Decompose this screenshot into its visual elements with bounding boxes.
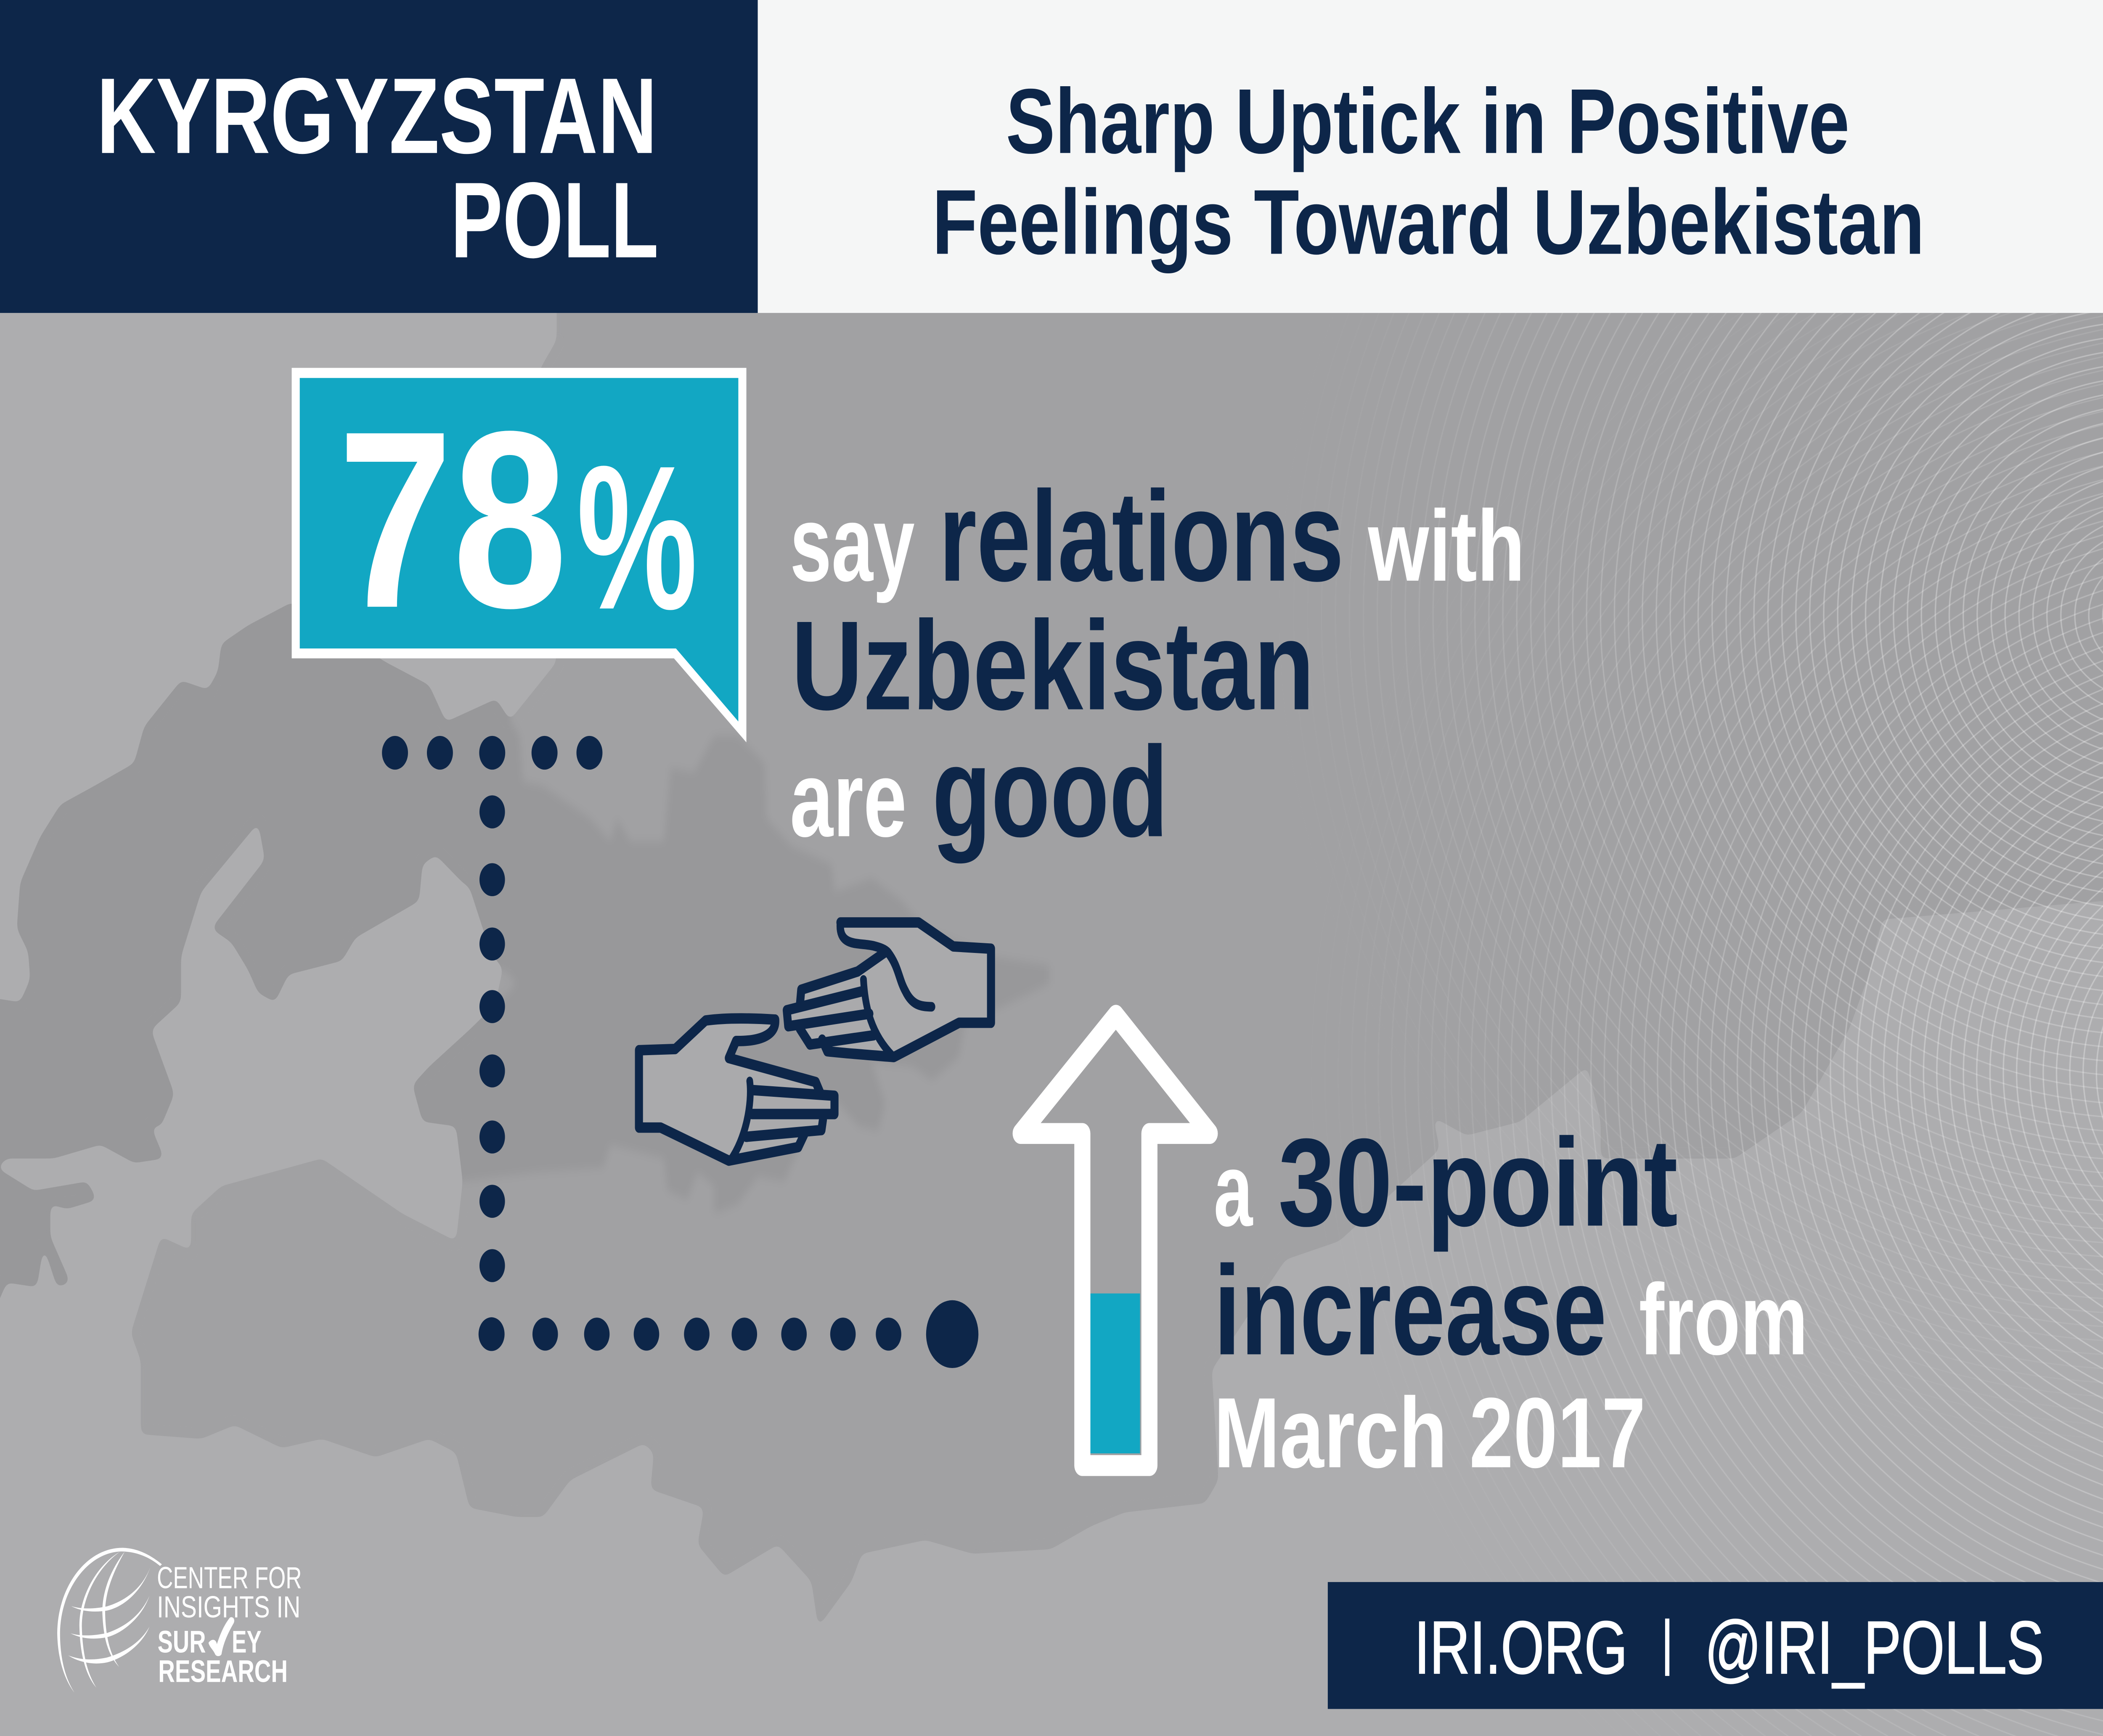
logo: center for insights in survey research (57, 1548, 302, 1693)
logo icon: check mark (209, 1617, 234, 1656)
figure: 78: 78 (338, 379, 567, 660)
logo text: research: RESEARCH (158, 1654, 288, 1689)
text block: 30-point increase: a (1214, 1131, 1253, 1248)
text block: relations statement: say (790, 483, 915, 604)
text block: 30-point increase: March 2017 (1214, 1377, 1646, 1488)
text block: relations statement (790, 464, 1525, 864)
title line 1: Sharp Uptick in Positive (1006, 70, 1849, 173)
logo: globe (57, 1548, 162, 1693)
link: handle: @IRI_POLLS (1705, 1606, 2044, 1689)
text block: relations statement: Uzbekistan (791, 595, 1314, 737)
icon: reaching hands (639, 922, 991, 1161)
text block: relations statement: relations (939, 464, 1344, 608)
text block: relations statement: with (1368, 490, 1525, 602)
footer bar: links (1328, 1582, 2103, 1709)
logo text: ey: EY (232, 1625, 262, 1660)
callout: 78 percent (292, 368, 747, 742)
icon: lower hand (639, 1019, 834, 1161)
logo text: center for: CENTER FOR (157, 1561, 302, 1595)
moire pattern: upper rings (1405, 313, 2103, 1326)
title line 2: Feelings Toward Uzbekistan (932, 171, 1925, 274)
heading: Poll: POLL (450, 160, 659, 281)
text block: 30-point increase: from (1639, 1263, 1808, 1376)
heading: Kyrgyzstan: KYRGYZSTAN (97, 56, 657, 176)
map: mid-tone land (131, 276, 2103, 1628)
moire pattern: lower rings (1444, 313, 2103, 1736)
figure: percent sign: % (577, 423, 697, 652)
text block: 30-point increase (1214, 1113, 1808, 1488)
divider (1665, 1619, 1669, 1676)
header: title panel (758, 0, 2103, 313)
text block: relations statement: good (932, 720, 1168, 864)
link: website: IRI.ORG (1414, 1606, 1628, 1689)
icon: upper hand (787, 922, 991, 1057)
logo text: sur: SUR (158, 1625, 206, 1660)
text block: relations statement: are (790, 739, 907, 859)
dotted connector (382, 736, 978, 1368)
text block: 30-point increase: increase (1214, 1240, 1607, 1381)
logo text: insights in: INSIGHTS IN (157, 1590, 300, 1624)
arrow: increase indicator (1021, 1015, 1210, 1466)
header: poll label panel (0, 0, 758, 313)
text block: 30-point increase: 30-point (1278, 1113, 1678, 1253)
map: dark land (0, 602, 1049, 1361)
